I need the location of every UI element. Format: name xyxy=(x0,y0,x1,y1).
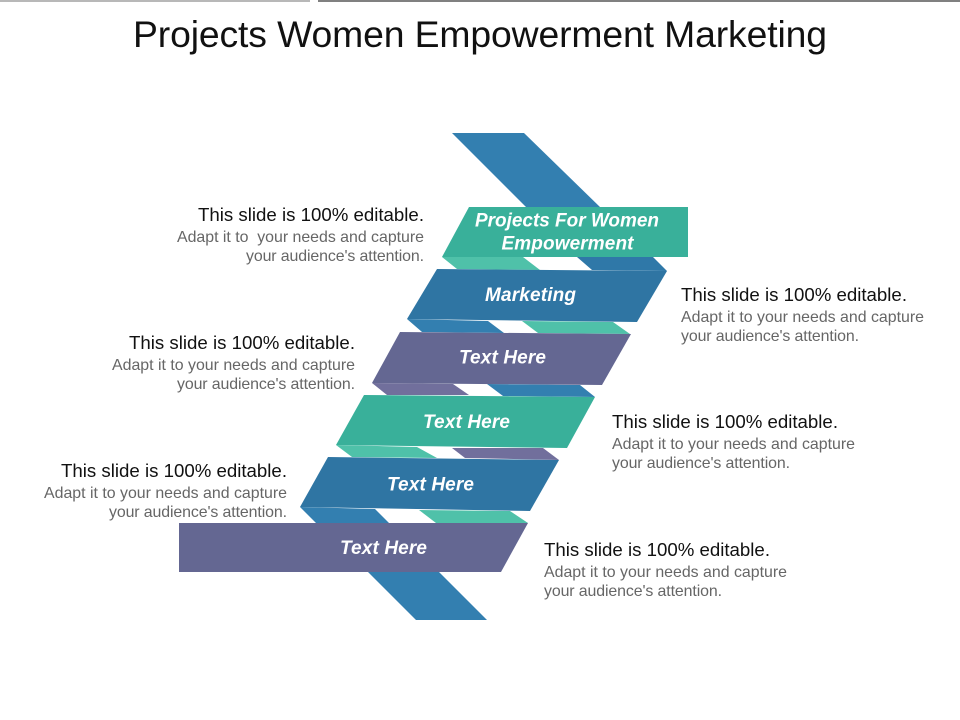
band: Text Here blue: Text Here xyxy=(387,474,474,496)
band: Text Here bottom purple: Text Here xyxy=(340,538,427,559)
callout: lower left: Adapt it to your needs and capture xyxy=(44,485,287,502)
ribbon top tail xyxy=(452,133,601,208)
band: Text Here purple: Text Here xyxy=(459,348,546,368)
band: Text Here bottom purple xyxy=(179,523,528,572)
fold: teal to blue, left xyxy=(336,445,437,458)
band: Marketing xyxy=(407,269,667,322)
callout: top left: This slide is 100% editable. xyxy=(198,204,424,225)
fold: blue to purple, left xyxy=(300,507,389,523)
fold: teal to blue, right xyxy=(452,448,559,460)
callout: middle right: Adapt it to your needs and capture xyxy=(612,436,855,453)
callout: lower left: This slide is 100% editable. xyxy=(61,460,287,481)
callout: upper right: This slide is 100% editable. xyxy=(681,284,907,305)
callout: middle left: your audience's attention. xyxy=(177,376,355,393)
callout: top left: your audience's attention. xyxy=(246,248,424,265)
callout: middle left: This slide is 100% editable. xyxy=(129,332,355,353)
fold: marketing to purple, left xyxy=(407,319,504,333)
fold: teal to marketing, right xyxy=(577,257,667,271)
band: Text Here teal xyxy=(336,395,595,448)
zigzag ribbon diagram xyxy=(179,133,688,620)
band: Projects For Women Empowerment: Projects For Women xyxy=(475,210,659,232)
fold: blue to purple, right xyxy=(419,510,528,523)
callout: middle right: This slide is 100% editable. xyxy=(612,411,838,432)
callout: upper right: Adapt it to your needs and capture xyxy=(681,309,924,326)
callout: lower right: Adapt it to your needs and capture xyxy=(544,564,787,581)
callout: middle left xyxy=(112,332,355,393)
title: Projects Women Empowerment Marketing xyxy=(133,13,827,55)
fold: teal to marketing, left xyxy=(442,257,540,270)
band: Marketing: Marketing xyxy=(485,285,576,306)
callout: middle right: your audience's attention. xyxy=(612,455,790,472)
fold: purple to teal, right xyxy=(487,384,595,397)
callout: top left: Adapt it to your needs and capture xyxy=(177,229,424,246)
band: Projects For Women Empowerment: Empowerment xyxy=(502,234,634,254)
callout: top left xyxy=(177,204,424,265)
callout: middle left: Adapt it to your needs and capture xyxy=(112,357,355,374)
callout: lower left xyxy=(44,460,287,521)
callout: lower right: your audience's attention. xyxy=(544,583,722,600)
callout: lower left: your audience's attention. xyxy=(109,504,287,521)
callout: lower right xyxy=(544,539,787,600)
fold: purple to teal, left xyxy=(372,383,469,395)
band: Projects For Women Empowerment xyxy=(442,207,688,257)
band: Text Here teal: Text Here xyxy=(423,412,510,433)
ribbon bottom tail xyxy=(368,572,487,620)
callout: middle right xyxy=(612,411,855,472)
fold: marketing to purple, right xyxy=(522,321,630,334)
callout: upper right: your audience's attention. xyxy=(681,328,859,345)
band: Text Here purple xyxy=(372,332,631,385)
callout: lower right: This slide is 100% editable. xyxy=(544,539,770,560)
callout: upper right xyxy=(681,284,924,345)
band: Text Here blue xyxy=(300,457,559,511)
